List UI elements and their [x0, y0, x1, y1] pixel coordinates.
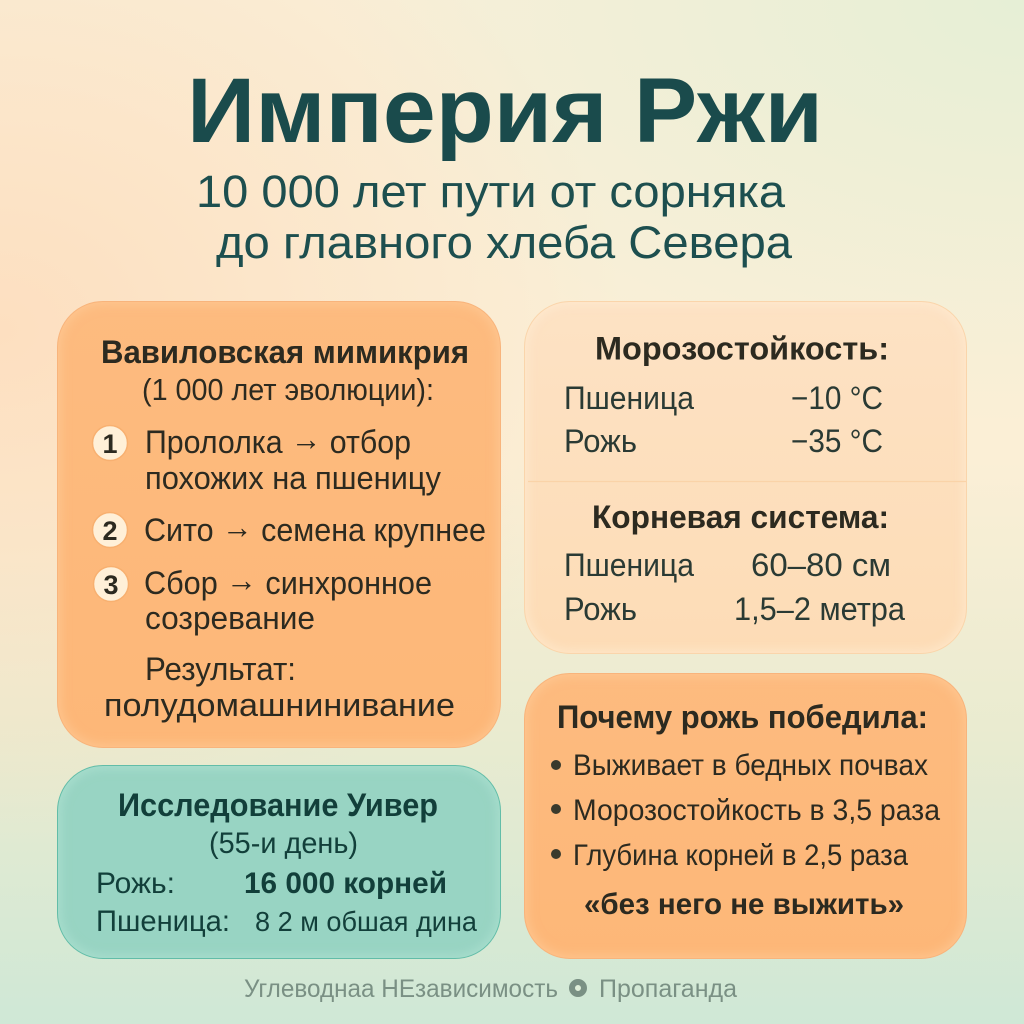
- step 1 text: →: [291, 421, 321, 457]
- step 2 text: Сито: [144, 512, 218, 548]
- row: rye roots: [564, 591, 905, 627]
- row: wheat frost: Пшеница: [564, 380, 694, 416]
- heading: frost resistance: Морозостойкость:: [595, 330, 889, 366]
- row: rye roots: 16 000 корней: [244, 867, 447, 900]
- row: rye frost: [564, 423, 883, 459]
- subheading: years of evolution: (1 000 лет эволюции):: [142, 372, 434, 407]
- footer: [244, 975, 737, 1003]
- panel: frost resistance and roots: [524, 301, 967, 654]
- step 1 text: [145, 421, 442, 496]
- step 3 text: →: [226, 562, 257, 598]
- step 3 text: [144, 562, 432, 636]
- step 1 badge: [92, 426, 128, 460]
- row: wheat roots: [564, 547, 891, 583]
- result text: Результат:: [145, 651, 296, 687]
- result text: [104, 651, 455, 723]
- heading: Vavilov mimicry: Вавиловская мимикрия: [101, 334, 469, 370]
- row: wheat roots: [96, 905, 477, 938]
- step 1 text: Прололка: [145, 424, 292, 460]
- subtitle: 10 000 лет пути от сорняка: [196, 166, 786, 217]
- row: rye frost: −35 °C: [791, 423, 883, 459]
- step 3 badge: [94, 566, 128, 602]
- row: rye roots: 1,5–2 метра: [734, 591, 905, 627]
- row: wheat frost: [564, 380, 883, 416]
- panel: why rye won: [524, 673, 967, 959]
- step 2 badge: 2: [102, 516, 118, 546]
- row: wheat roots: 60–80 см: [751, 547, 891, 583]
- quote: «без него не выжить»: [584, 888, 904, 921]
- subtitle: [196, 166, 793, 268]
- bullet: poor soils: Выживает в бедных почвах: [573, 749, 928, 782]
- step 3 text: Сбор: [144, 565, 222, 601]
- step 3 text: синхронное: [265, 565, 432, 601]
- bullet: frost resistance: Морозостойкость в 3,5 раза: [573, 794, 941, 827]
- step 3 badge: 3: [103, 570, 119, 600]
- row: wheat roots: Пшеница: [564, 547, 694, 583]
- panel: Weaver study: [57, 765, 501, 959]
- bullet: root depth: Глубина корней в 2,5 раза: [573, 839, 909, 872]
- subheading: day 55: (55-и день): [209, 827, 358, 860]
- footer: Углеводнаа НЕзависимость: [244, 975, 558, 1003]
- heading: root system: Корневая система:: [592, 499, 889, 535]
- step 2 badge: [92, 512, 128, 548]
- subtitle: до главного хлеба Севера: [216, 217, 793, 268]
- step 1 text: отбор: [330, 424, 411, 460]
- step 3 text: созревание: [145, 600, 315, 636]
- row: wheat roots: 8 2 м обшая дина: [255, 906, 477, 937]
- panel: Vavilov mimicry: [57, 301, 501, 748]
- footer: Пропаганда: [599, 975, 737, 1003]
- row: wheat roots: Пшеница:: [96, 905, 230, 938]
- step 2 text: семена крупнее: [261, 512, 486, 548]
- row: rye roots: Рожь: [564, 591, 637, 627]
- row: rye frost: Рожь: [564, 423, 637, 459]
- row: rye roots: Рожь:: [96, 867, 175, 900]
- heading: why rye won: Почему рожь победила:: [557, 699, 928, 735]
- title: Империя Ржи: [187, 60, 823, 162]
- step 1 text: похожих на пшеницу: [145, 460, 442, 496]
- step 1 badge: 1: [102, 429, 118, 459]
- step 2 text: →: [222, 509, 253, 545]
- row: wheat frost: −10 °C: [791, 380, 883, 416]
- result text: полудомашнинивание: [104, 687, 455, 723]
- row: rye roots: [96, 867, 447, 900]
- heading: Weaver study: Исследование Уивер: [118, 787, 438, 823]
